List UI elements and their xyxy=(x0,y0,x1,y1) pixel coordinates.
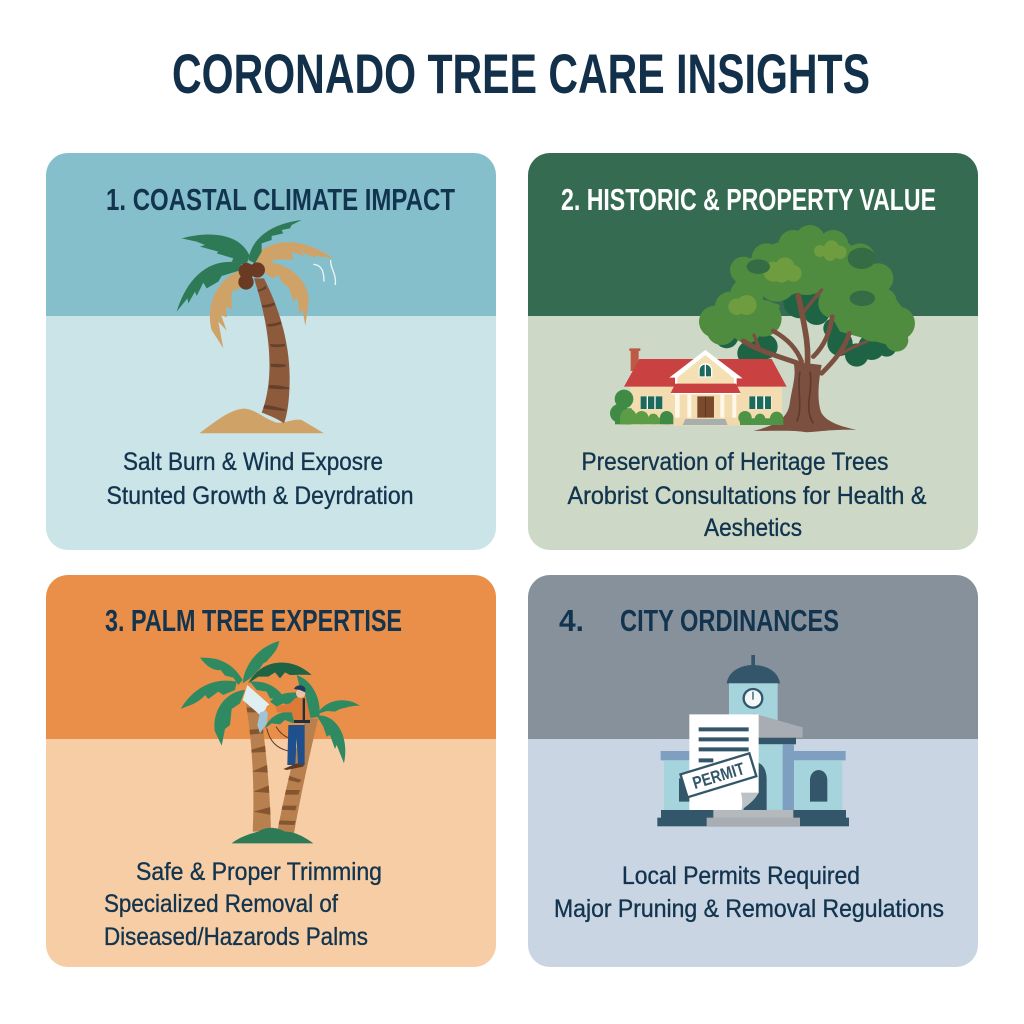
text: city ordinance details xyxy=(554,862,944,923)
panel: palm tree expertise xyxy=(46,575,496,967)
heading: coastal climate impact: 1. COASTAL CLIMATE IMPACT xyxy=(106,182,455,217)
text: coastal climate details xyxy=(106,448,414,510)
text: palm expertise details xyxy=(104,858,382,951)
text: palm expertise details: Safe & Proper Trimming xyxy=(136,858,382,886)
stamp text: permit: PERMIT xyxy=(690,758,747,793)
icon: heritage oak tree and house xyxy=(610,225,915,432)
icon: city hall with permit document xyxy=(657,655,849,826)
panel: coastal climate impact xyxy=(46,153,496,550)
icon: arborist climbing twin palms xyxy=(181,641,360,843)
text: coastal climate details: Stunted Growth & Deyrdration xyxy=(106,482,414,510)
panel: city ordinances xyxy=(528,575,978,967)
text: city ordinance details: Local Permits Required xyxy=(622,862,860,890)
heading: palm tree expertise: 3. PALM TREE EXPERTISE xyxy=(105,603,402,638)
panel: historic and property value xyxy=(528,153,978,550)
text: city ordinance details: Major Pruning & Removal Regulations xyxy=(554,895,944,923)
text: coastal climate details: Salt Burn & Wind Exposre xyxy=(123,448,383,476)
icon: wind-burned palm tree on sand xyxy=(177,220,335,433)
text: palm expertise details: Diseased/Hazarods Palms xyxy=(104,923,368,951)
text: palm expertise details: Specialized Removal of xyxy=(104,890,338,918)
text: historic value details xyxy=(568,448,927,542)
text: historic value details: Preservation of Heritage Trees xyxy=(582,448,888,476)
heading: city ordinances number: 4. xyxy=(559,603,584,638)
heading: city ordinances: CITY ORDINANCES xyxy=(620,603,839,638)
text: historic value details: Arobrist Consultations for Health & xyxy=(568,482,927,510)
text: historic value details: Aeshetics xyxy=(704,514,802,542)
